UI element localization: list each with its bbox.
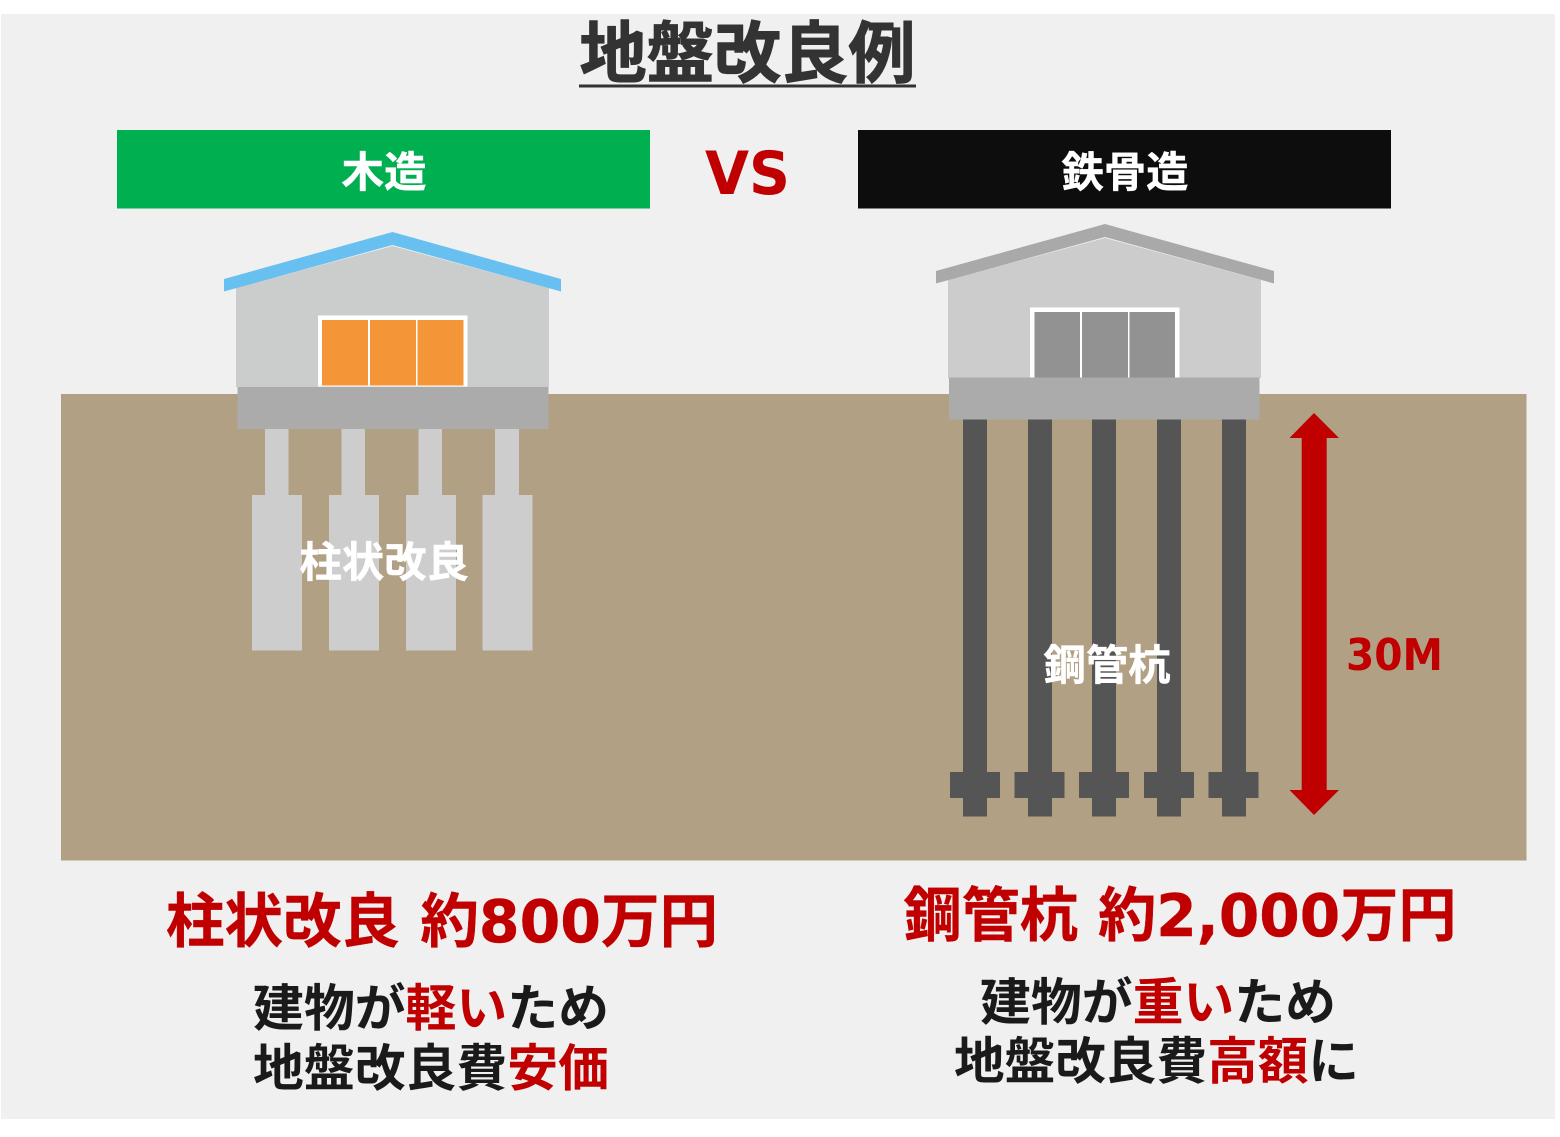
foundation (949, 378, 1260, 420)
label: column improvement: 柱状改良 (300, 538, 469, 587)
wooden house (224, 232, 561, 429)
header: steel construction: 鉄骨造 (1062, 148, 1188, 197)
right description: 建物が重いため (980, 973, 1336, 1032)
window (1030, 308, 1180, 378)
house wall (948, 238, 1261, 378)
roof (936, 224, 1274, 284)
house wall (236, 246, 549, 387)
depth label 30M: 30M (1346, 630, 1443, 681)
title: 地盤改良例 (580, 15, 916, 93)
arrow: depth (1290, 413, 1339, 815)
right description: 地盤改良費高額に (954, 1032, 1359, 1091)
foundation (238, 387, 548, 429)
steel house (936, 224, 1274, 420)
header: steel construction (858, 130, 1391, 208)
soil columns (252, 429, 532, 650)
right description (954, 973, 1359, 1091)
ground (61, 394, 1526, 860)
VS label: VS (705, 139, 790, 209)
left description (253, 979, 609, 1098)
left cost: 柱状改良 約800万円 (166, 887, 718, 956)
left description: 建物が軽いため (253, 979, 609, 1038)
header: wooden construction (117, 130, 650, 208)
window (318, 316, 468, 386)
label: steel pipe pile: 鋼管杭 (1044, 641, 1170, 690)
header: wooden construction: 木造 (342, 148, 426, 197)
steel piles (950, 420, 1258, 816)
left description: 地盤改良費安価 (253, 1039, 609, 1098)
roof (224, 232, 561, 292)
right cost: 鋼管杭 約2,000万円 (904, 881, 1456, 950)
